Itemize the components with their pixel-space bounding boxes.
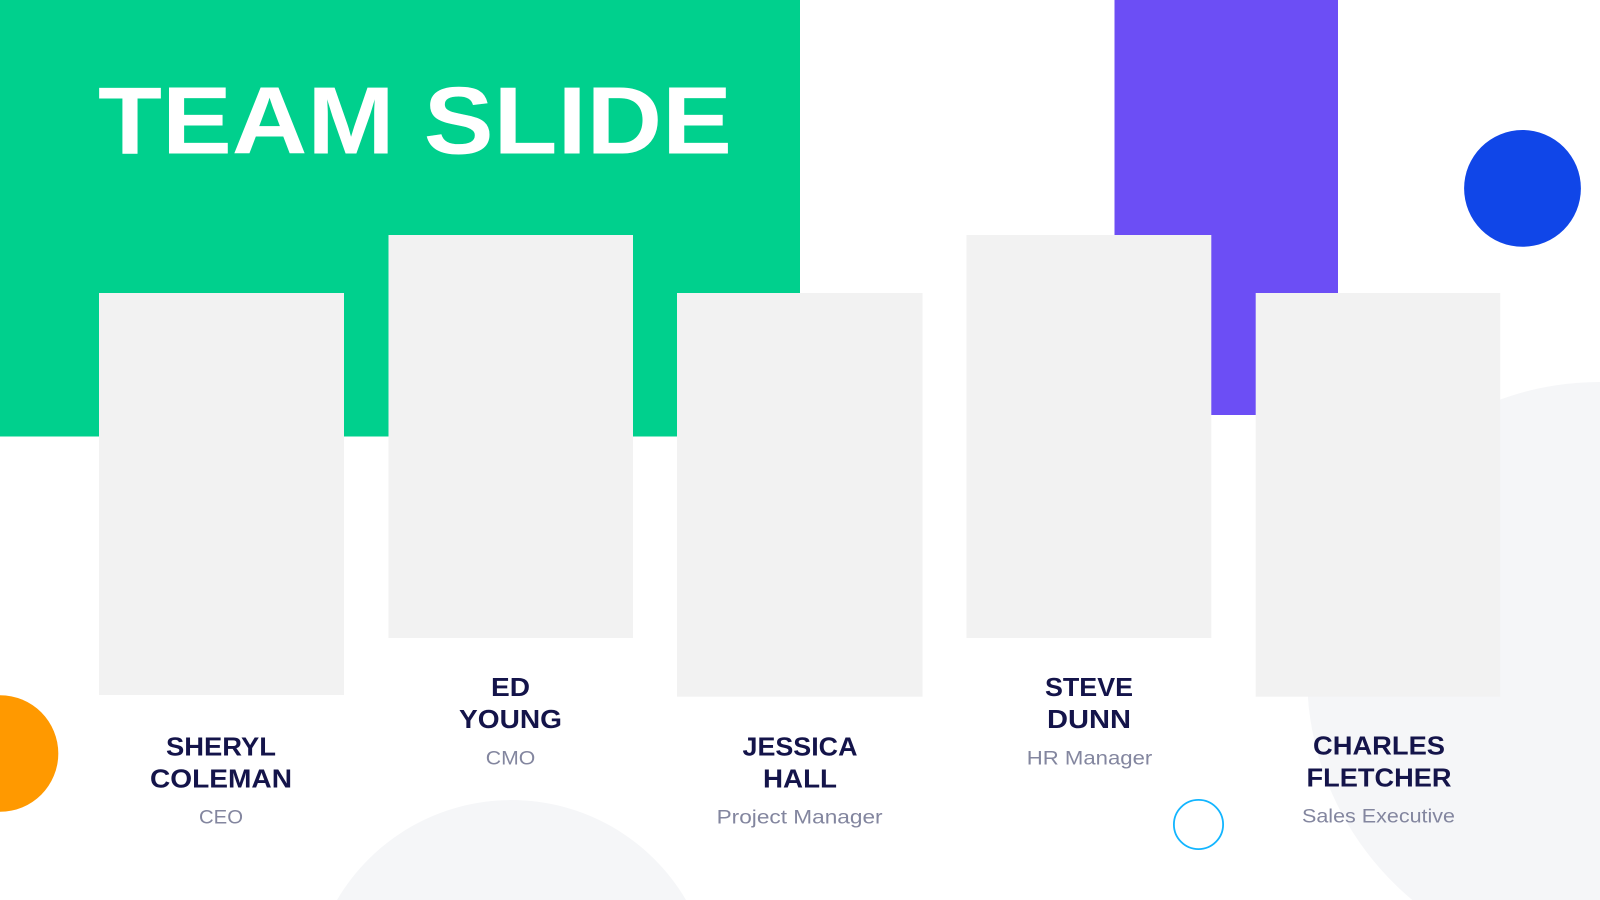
- photo placeholder: [99, 293, 344, 695]
- name: [1045, 672, 1133, 734]
- panel: green header block: [0, 0, 800, 436]
- panel: purple block: [1114, 0, 1338, 415]
- role: CEO: [199, 806, 243, 828]
- name: SHERYL: [166, 732, 276, 762]
- name: COLEMAN: [150, 763, 292, 793]
- name: HALL: [763, 763, 837, 793]
- name: ED: [491, 672, 530, 702]
- team member: Steve Dunn: [966, 235, 1211, 770]
- role: CMO: [486, 748, 535, 770]
- name: JESSICA: [742, 732, 858, 762]
- role: HR Manager: [1027, 748, 1153, 770]
- name: [1306, 731, 1452, 793]
- icon: orange circle: [0, 695, 58, 812]
- photo placeholder: [677, 293, 922, 697]
- photo placeholder: [1256, 293, 1500, 697]
- name: DUNN: [1047, 704, 1131, 734]
- icon: cyan ring: [1174, 800, 1223, 849]
- name: YOUNG: [459, 704, 562, 734]
- photo placeholder: [966, 235, 1211, 638]
- name: [459, 672, 562, 734]
- name: [742, 732, 858, 793]
- name: CHARLES: [1313, 731, 1445, 761]
- name: STEVE: [1045, 672, 1133, 702]
- team member: Charles Fletcher: [1256, 293, 1500, 828]
- photo placeholder: [388, 235, 633, 638]
- team member: Ed Young: [388, 235, 633, 770]
- name: [150, 732, 292, 793]
- role: Project Manager: [717, 806, 883, 828]
- role: Sales Executive: [1302, 806, 1455, 828]
- icon: blue circle: [1464, 130, 1581, 247]
- team member: Sheryl Coleman: [99, 293, 344, 828]
- name: FLETCHER: [1306, 763, 1452, 793]
- title: TEAM SLIDE: [98, 68, 732, 174]
- team member: Jessica Hall: [677, 293, 922, 828]
- background circle: bottom grey: [337, 800, 686, 900]
- background circle: right grey: [1307, 382, 1600, 900]
